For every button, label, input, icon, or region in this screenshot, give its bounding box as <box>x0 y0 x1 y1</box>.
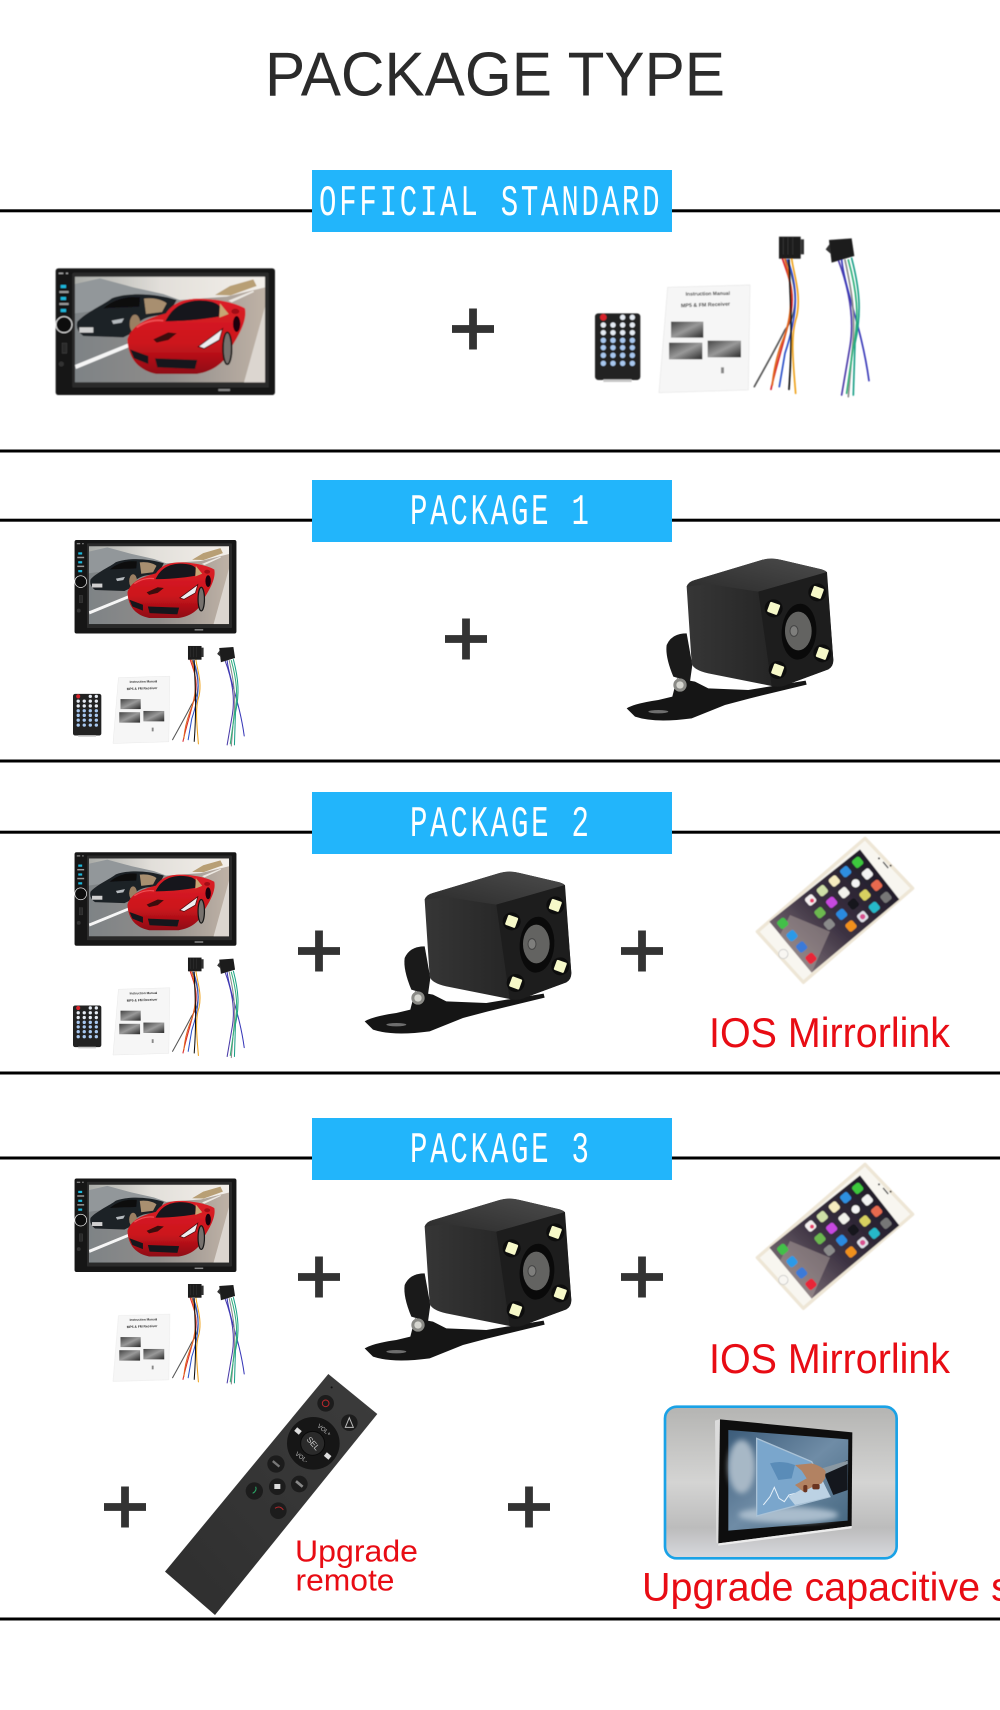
label: IOS Mirrorlink: IOS Mirrorlink <box>709 1009 951 1056</box>
icon: upgrade remote control: VOL+ <box>316 1424 332 1438</box>
icon: plus <box>104 1486 146 1528</box>
label: upgrade remote <box>295 1534 418 1598</box>
icon: car head unit <box>75 540 236 634</box>
icon: plus <box>445 618 487 660</box>
label: upgrade remote: Upgrade <box>295 1534 418 1568</box>
icon: remote, manual and wiring harness <box>73 646 244 746</box>
icon: upgrade remote control: VOL- <box>294 1451 308 1465</box>
heading: official standard: OFFICIAL STANDARD <box>319 180 662 229</box>
icon: plus <box>298 930 340 972</box>
icon: backup camera <box>365 872 571 1033</box>
panel: package 3 <box>0 1118 1000 1620</box>
icon: smartphone <box>757 838 913 982</box>
heading: package 2 <box>312 792 672 854</box>
title: PACKAGE TYPE <box>265 40 725 110</box>
heading: package 1: PACKAGE 1 <box>410 489 592 538</box>
icon: capacitive touch screen photo <box>665 1407 897 1558</box>
icon: remote, manual and wiring harness <box>73 958 244 1058</box>
icon: car head unit <box>75 1179 236 1272</box>
icon: plus <box>508 1486 550 1528</box>
label: upgrade capacitive screen: Upgrade capacitive s <box>642 1566 1000 1610</box>
heading: package 2: PACKAGE 2 <box>410 801 592 850</box>
icon: plus <box>621 1256 663 1298</box>
icon: remote, manual and wiring harness <box>595 237 869 397</box>
icon: plus <box>452 308 494 350</box>
icon: car head unit <box>75 852 236 946</box>
label: IOS Mirrorlink: IOS Mirrorlink <box>709 1335 951 1382</box>
label: upgrade remote: remote <box>296 1562 394 1598</box>
icon: backup camera <box>627 559 833 720</box>
icon: plus <box>621 930 663 972</box>
icon: backup camera <box>365 1199 571 1360</box>
panel: package 2 <box>0 792 1000 1074</box>
icon: smartphone <box>757 1164 913 1308</box>
heading: package 3: PACKAGE 3 <box>410 1127 592 1176</box>
icon: plus <box>298 1256 340 1298</box>
heading: package 3 <box>312 1118 672 1180</box>
heading: package 1 <box>312 480 672 542</box>
icon: manual and wiring harness <box>113 1284 244 1384</box>
panel: official standard <box>0 170 1000 452</box>
panel: package 1 <box>0 480 1000 762</box>
icon: upgrade remote control: SEL <box>305 1435 322 1453</box>
icon: upgrade remote control <box>165 1374 377 1615</box>
icon: car head unit <box>56 268 275 395</box>
